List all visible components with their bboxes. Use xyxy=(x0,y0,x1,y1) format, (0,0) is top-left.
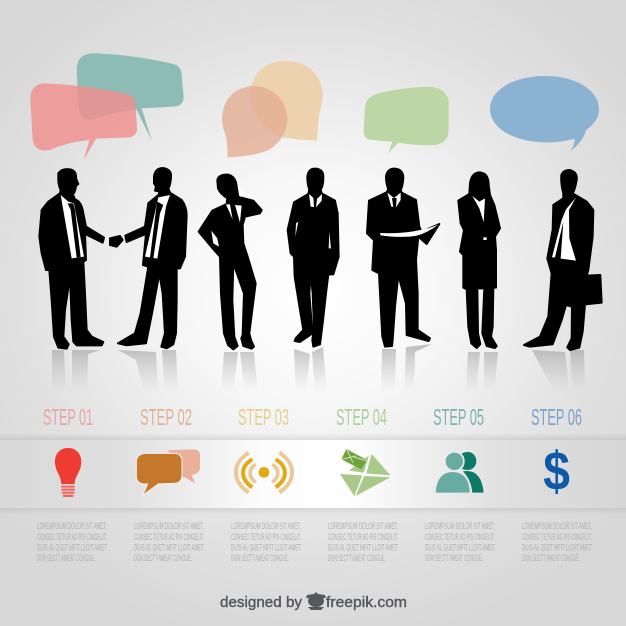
text: DUIS AL QUET MFIT LLOIT AMET xyxy=(134,542,204,554)
text block: step 06 xyxy=(522,521,592,564)
text block: step 01 xyxy=(37,521,107,564)
text: CONSEC TETUR AD PIS CINGELIT. xyxy=(328,532,398,543)
speech bubbles xyxy=(30,53,599,160)
text: CONSEC TETUR AD PIS CINGELIT. xyxy=(425,532,495,543)
footer credit: freepik.com xyxy=(326,595,407,611)
text block: step 04 xyxy=(328,521,398,564)
text block: step 02: DON SECTT AMEAT CONGUE. xyxy=(134,553,192,564)
label: step 04: STEP 04 xyxy=(336,404,387,430)
figure: woman with arms crossed xyxy=(458,172,500,348)
text: CONSEC TETUR AD PIS CINGELIT. xyxy=(134,532,204,543)
footer credit xyxy=(220,592,407,611)
text: LOREMPSUM DOLOR SIT AMET, xyxy=(37,521,107,532)
figure: man shaking hands, left xyxy=(39,169,123,349)
text: DUIS AL QUET MFIT LLOIT AMET xyxy=(37,542,107,554)
icon: dollar sign: $ xyxy=(543,440,570,502)
icon: chat bubbles xyxy=(136,449,200,495)
bubble: light orange xyxy=(249,61,323,141)
label: step 01: STEP 01 xyxy=(43,404,93,430)
icon: people xyxy=(436,452,484,493)
footer credit: designed by xyxy=(220,595,303,611)
text: CONSEC TETUR AD PIS CINGELIT. xyxy=(37,532,107,543)
icon: signal waves xyxy=(236,453,292,492)
text: LOREMPSUM DOLOR SIT AMET, xyxy=(134,521,204,532)
bubble: green xyxy=(364,87,449,153)
text block: step 02 xyxy=(134,521,204,564)
reflections under figures xyxy=(52,344,585,395)
figure: man with briefcase xyxy=(524,170,602,350)
text: LOREMPSUM DOLOR SIT AMET, xyxy=(425,521,495,532)
bubble: salmon xyxy=(222,86,288,157)
label: step 06: STEP 06 xyxy=(531,404,582,430)
text block: step 05: DON SECTT AMEAT CONGUE. xyxy=(425,553,483,564)
text: CONSEC TETUR AD PIS CINGELIT. xyxy=(231,532,301,543)
text: DUIS AL QUET MFIT LLOIT AMET xyxy=(425,542,495,554)
label: step 02: STEP 02 xyxy=(140,404,192,430)
text block: step 05 xyxy=(425,521,495,564)
icon band xyxy=(0,433,626,515)
figure: woman on phone xyxy=(199,175,262,349)
text block: step 03: DON SECTT AMEAT CONGUE. xyxy=(231,553,289,564)
text: DUIS AL QUET MFIT LLOIT AMET xyxy=(231,542,301,554)
bubble: pink xyxy=(30,83,137,160)
text block: step 03 xyxy=(231,521,301,564)
bubble: blue xyxy=(490,76,599,151)
text: LOREMPSUM DOLOR SIT AMET, xyxy=(328,521,398,532)
icon: light bulb xyxy=(55,448,81,497)
figure: man reading document xyxy=(367,169,439,347)
text: DUIS AL QUET MFIT LLOIT AMET xyxy=(328,542,398,554)
label: step 05: STEP 05 xyxy=(433,404,484,430)
bubble: teal xyxy=(77,53,184,141)
step labels xyxy=(43,404,582,430)
figure: man shaking hands, right xyxy=(118,168,187,348)
label: step 03: STEP 03 xyxy=(238,404,289,430)
icon: freepik logo xyxy=(306,592,326,610)
icon: envelopes xyxy=(340,449,390,496)
text block: step 01: DON SECTT AMEAT CONGUE. xyxy=(37,553,95,564)
text block: step 04: DON SECTT AMEAT CONGUE. xyxy=(328,553,386,564)
text: LOREMPSUM DOLOR SIT AMET, xyxy=(231,521,301,532)
figure: man standing xyxy=(288,169,339,347)
